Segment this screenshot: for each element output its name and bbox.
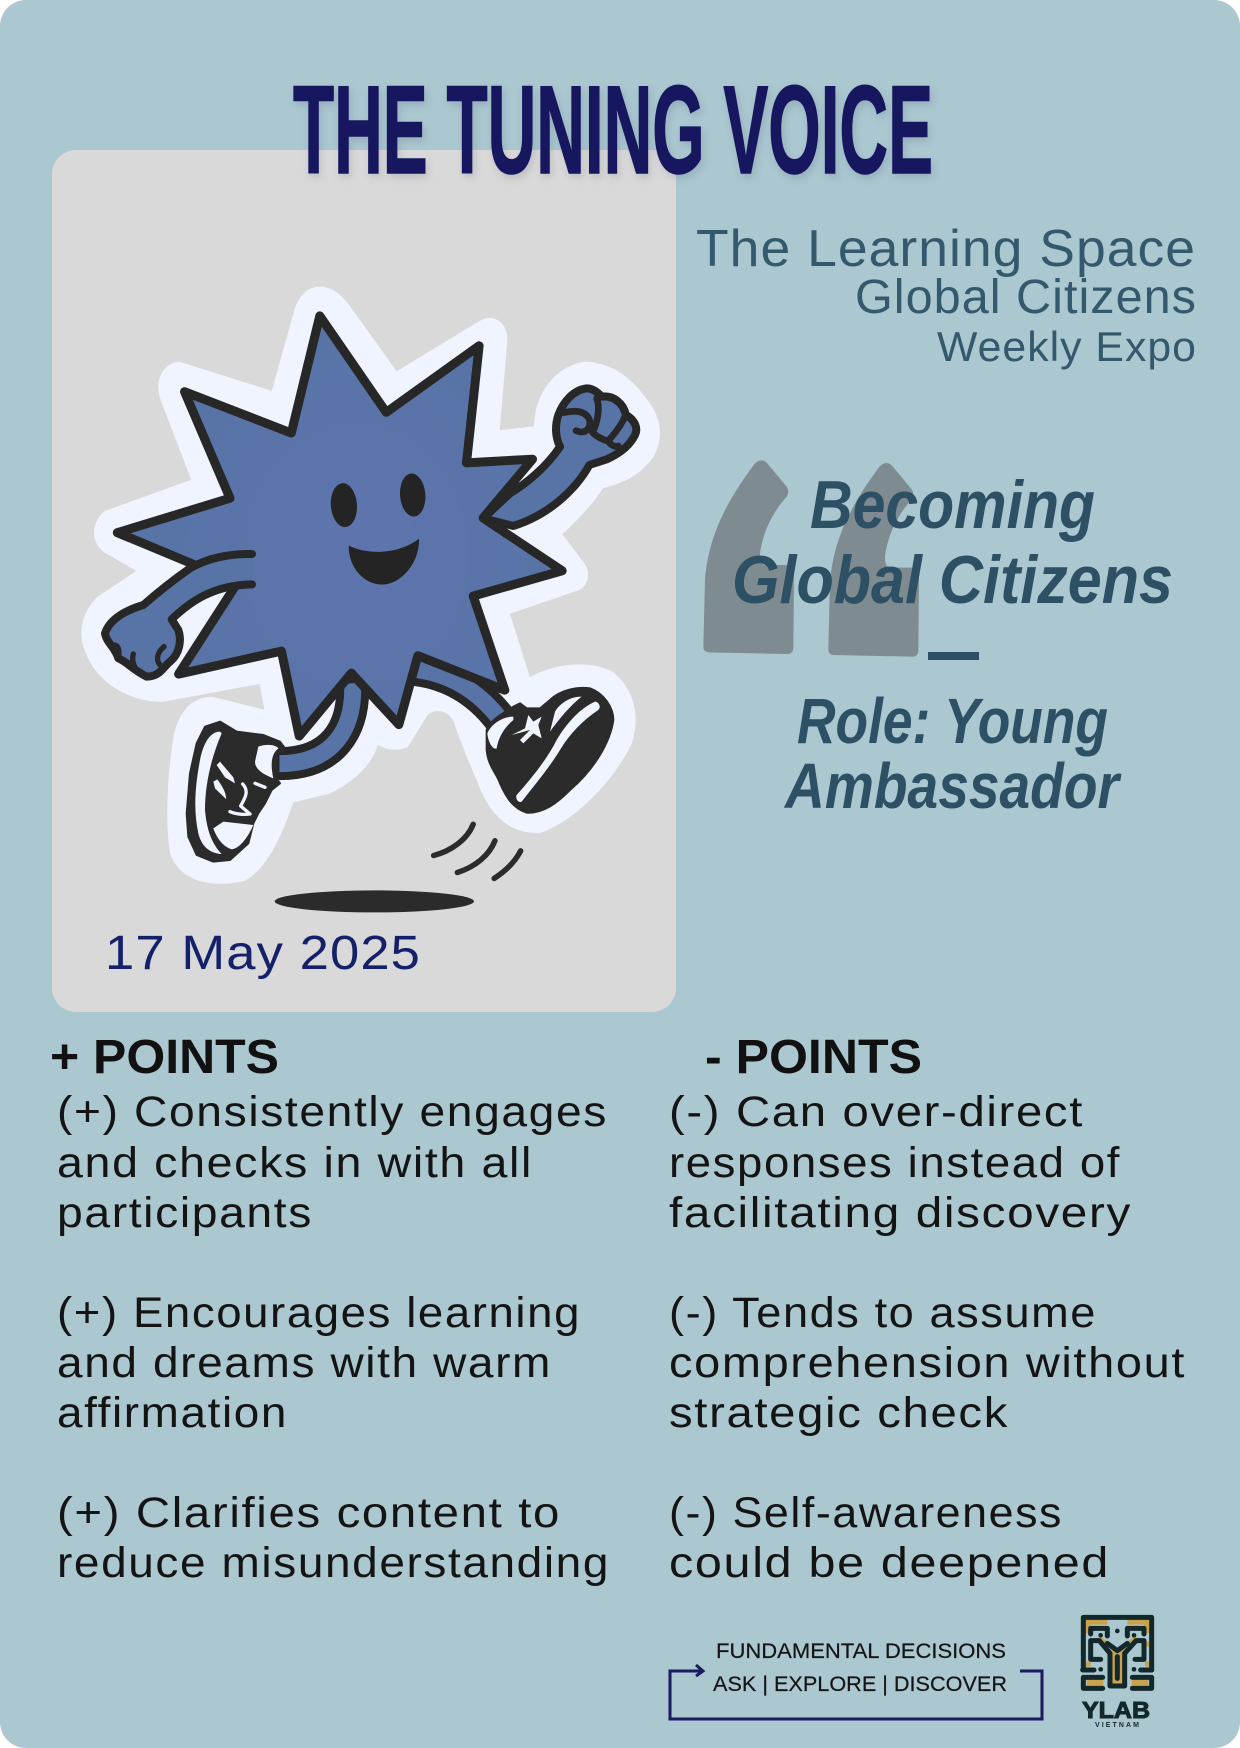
ground shadow	[275, 890, 474, 912]
minus point 2	[669, 1289, 1186, 1437]
role: young: Role: Young	[797, 685, 1108, 757]
quote: dash	[928, 652, 979, 660]
tagline line 1: FUNDAMENTAL DECISIONS	[716, 1640, 1006, 1663]
minus point 3: could be deepened	[669, 1539, 1110, 1587]
leg outline: right	[416, 670, 499, 718]
heading: plus points: + POINTS	[50, 1031, 279, 1084]
legs and star body group	[117, 316, 562, 912]
subtitle: global citizens: Global Citizens	[855, 271, 1197, 324]
sneaker: left	[187, 722, 285, 862]
heading: minus points: - POINTS	[705, 1031, 922, 1084]
logo text: YLAB: YLAB	[1082, 1697, 1150, 1723]
plus point 3	[57, 1489, 610, 1587]
plus point 2	[57, 1289, 581, 1437]
subtitle: the learning space: The Learning Space	[696, 220, 1196, 278]
minus point 1	[669, 1088, 1132, 1237]
subtitle block	[696, 220, 1197, 370]
tagline line 2: ASK | EXPLORE | DISCOVER	[713, 1673, 1007, 1696]
panel: minus points	[669, 1031, 1186, 1587]
sneaker: right	[487, 688, 613, 813]
date: 17 May 2025	[105, 927, 421, 980]
motion lines	[434, 824, 521, 878]
minus point 2: comprehension without	[669, 1339, 1186, 1387]
minus point 2: strategic check	[669, 1389, 1009, 1437]
smile	[349, 539, 419, 585]
plus point 1	[57, 1088, 608, 1237]
logo: YLAB mark	[1083, 1617, 1152, 1688]
subtitle: weekly expo: Weekly Expo	[937, 323, 1197, 370]
eye left	[329, 482, 359, 529]
minus point 3: (-) Self-awareness	[669, 1489, 1063, 1537]
footer tagline	[713, 1640, 1007, 1696]
minus point 1: responses instead of	[669, 1139, 1121, 1187]
plus point 1: (+) Consistently engages	[57, 1088, 608, 1136]
plus point 1: participants	[57, 1189, 313, 1237]
mascot: running star character	[84, 289, 657, 912]
plus point 2: and dreams with warm	[57, 1339, 552, 1387]
star body	[117, 316, 562, 736]
icon: quotation marks	[703, 460, 919, 657]
arrow: loop bracket	[670, 1665, 1042, 1719]
lowered arm and fist	[105, 554, 253, 677]
plus point 2: affirmation	[57, 1389, 288, 1437]
minus point 2: (-) Tends to assume	[669, 1289, 1097, 1337]
leg fill: right	[416, 670, 499, 718]
panel: plus points	[50, 1031, 610, 1587]
panel: mascot card	[52, 150, 676, 1012]
logo text: Vietnam: VIETNAM	[1095, 1722, 1139, 1729]
minus point 3	[669, 1489, 1110, 1587]
role: ambassador: Ambassador	[783, 750, 1122, 822]
plus point 1: and checks in with all	[57, 1139, 533, 1187]
raised arm and fist	[483, 388, 636, 526]
quote: global citizens: Global Citizens	[732, 542, 1173, 618]
eye right	[398, 472, 427, 518]
plus point 3: (+) Clarifies content to	[57, 1489, 561, 1537]
minus point 1: facilitating discovery	[669, 1189, 1132, 1237]
plus point 3: reduce misunderstanding	[57, 1539, 610, 1587]
leg fill: left	[279, 683, 353, 764]
leg outline: left	[279, 683, 353, 764]
sticker white border	[84, 289, 657, 881]
plus point 2: (+) Encourages learning	[57, 1289, 581, 1337]
minus point 1: (-) Can over-direct	[669, 1088, 1084, 1136]
quote text block	[732, 467, 1173, 822]
quote: becoming: Becoming	[810, 467, 1095, 543]
